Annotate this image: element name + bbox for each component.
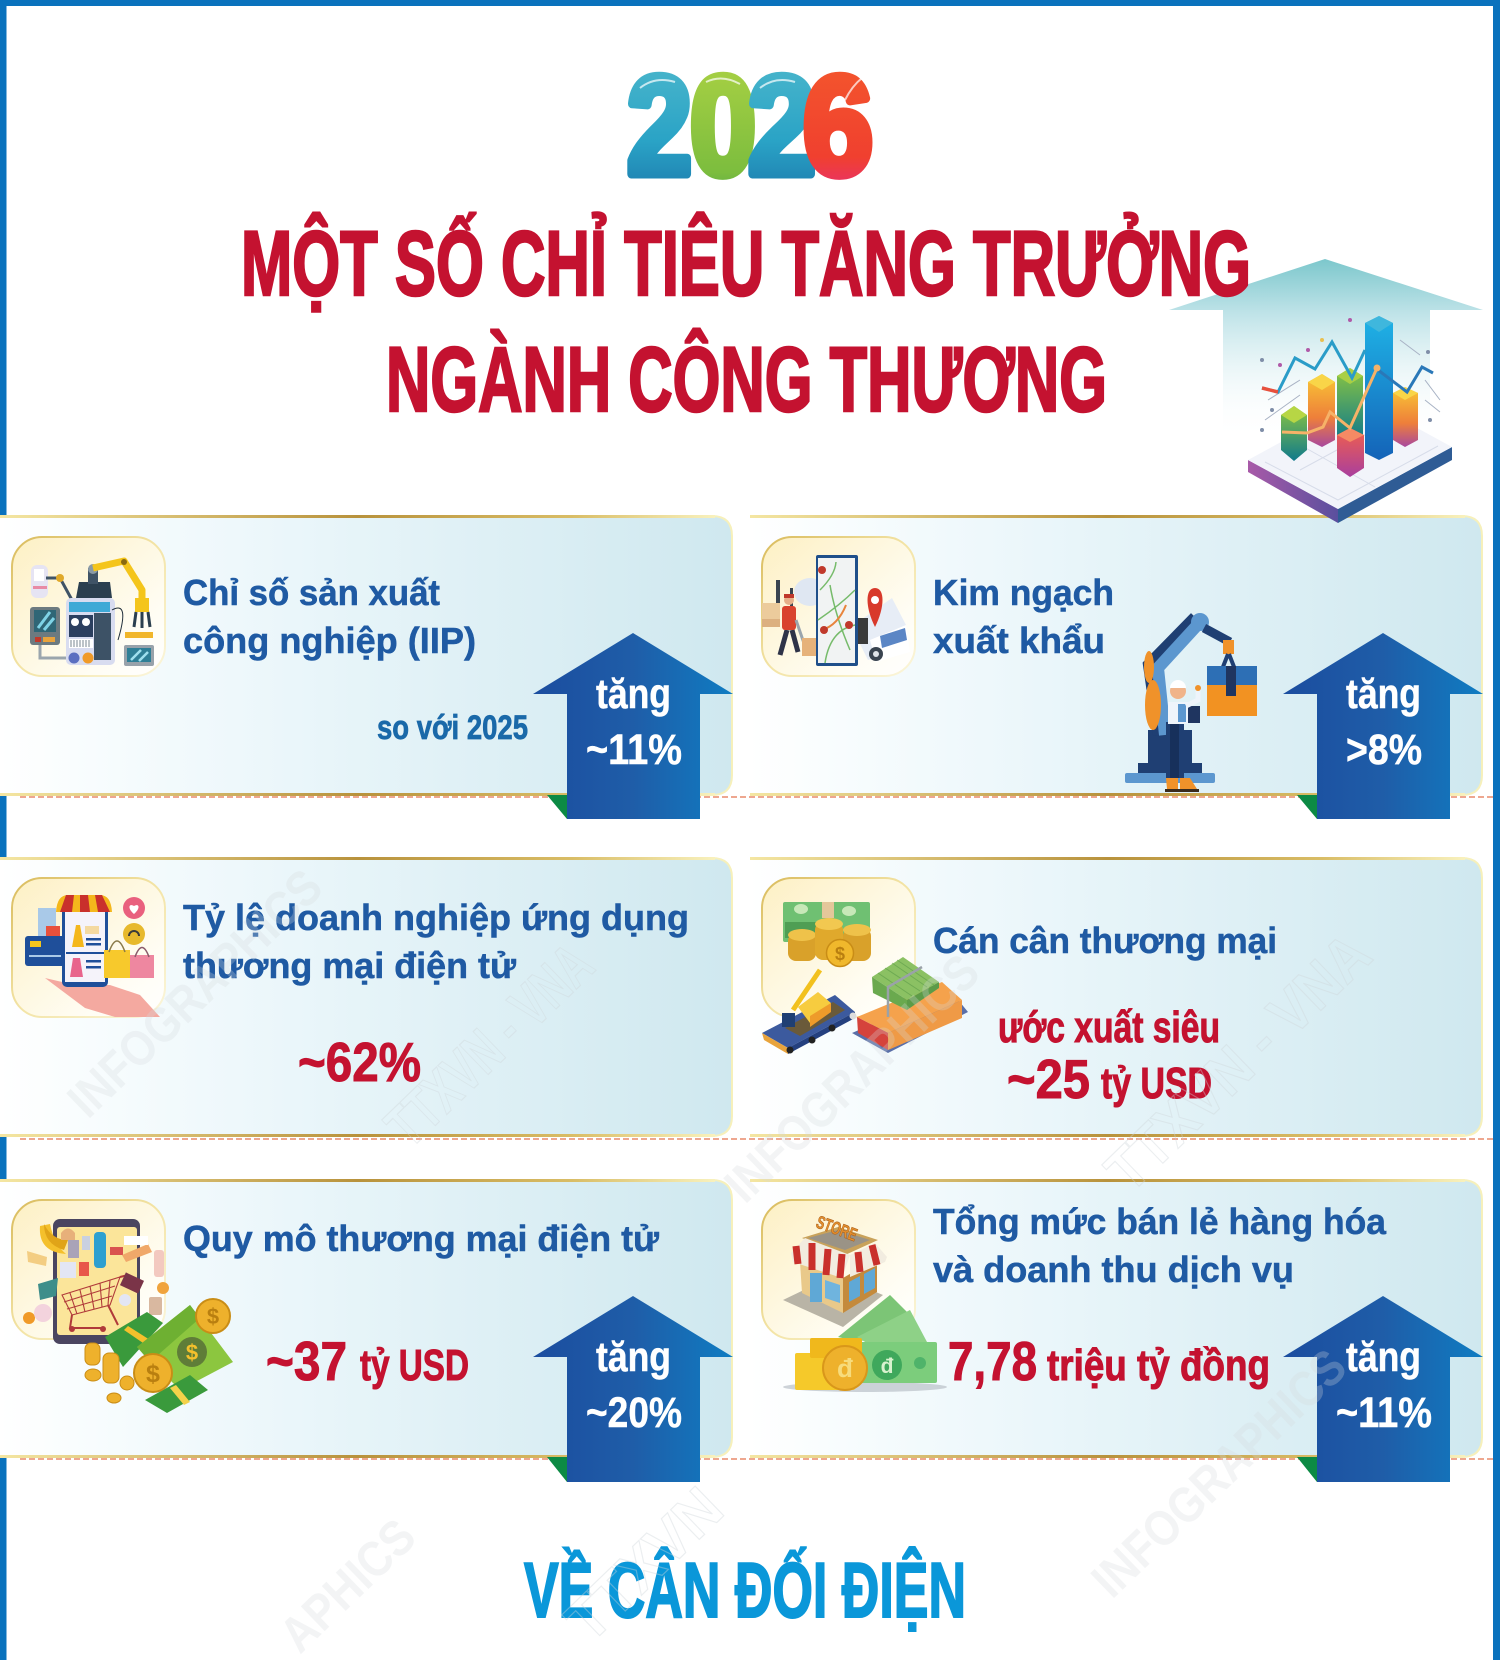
value: ước xuất siêu: ước xuất siêu <box>998 1003 1220 1052</box>
value: 7,78 triệu tỷ đồng: triệu tỷ đồng <box>1047 1341 1270 1390</box>
watermark: infographics and TTXVN VNA: INFOGRAPHICS <box>714 943 990 1213</box>
watermark: infographics and TTXVN VNA: TTXVN <box>552 1474 736 1654</box>
heading: Cán cân thương mại <box>933 920 1277 961</box>
icon: cash, crane truck and containers <box>762 878 968 1054</box>
heading: Kim ngạch <box>933 572 1114 613</box>
icon: 2026 colourful year <box>627 47 873 204</box>
icon: factory robot <box>12 537 165 676</box>
icon: logistics map and delivery truck <box>762 537 915 676</box>
value: ~25 tỷ USD <box>1007 1048 1212 1110</box>
arrow: tăng ~20%: tăng <box>596 1333 671 1380</box>
arrow: tăng ~20%: ~20% <box>586 1389 682 1437</box>
panel: kim ngạch xuất khẩu <box>750 515 1483 819</box>
value: ~62%: ~62% <box>298 1031 421 1093</box>
watermark: infographics and TTXVN VNA: INFOGRAPHICS <box>1081 1338 1357 1608</box>
icon: online shopping cart and money <box>12 1200 233 1413</box>
icon: 2026 colourful year: 0 <box>690 47 756 204</box>
icon: 2026 colourful year: 6 <box>803 47 873 204</box>
heading <box>183 897 689 986</box>
icon: pale growth arrow behind title <box>1169 259 1483 440</box>
value: ~37 tỷ USD: ~37 <box>266 1330 347 1392</box>
watermark: infographics and TTXVN VNA <box>57 858 1384 1660</box>
arrow: tăng ~11%: tăng <box>1346 1333 1421 1380</box>
value: ~25 tỷ USD: tỷ USD <box>1101 1059 1212 1108</box>
icon: store with banknotes and coins <box>762 1200 947 1392</box>
heading <box>933 1201 1387 1290</box>
icon: cash, crane truck and containers: $ <box>835 944 845 964</box>
icon: store with banknotes and coins: đ <box>837 1353 853 1383</box>
watermark: infographics and TTXVN VNA: TTXVN - VNA <box>372 931 606 1159</box>
icon: store with banknotes and coins: STORE <box>814 1212 860 1245</box>
illustration: robot arm and worker <box>1125 613 1257 792</box>
heading: và doanh thu dịch vụ <box>933 1249 1294 1290</box>
heading: thương mại điện tử <box>183 945 517 986</box>
icon: store with banknotes and coins: đ <box>881 1355 894 1378</box>
heading: Tổng mức bán lẻ hàng hóa <box>933 1201 1387 1242</box>
note: so với 2025: so với 2025 <box>377 709 528 747</box>
watermark: infographics and TTXVN VNA: TTXVN - VNA <box>1092 920 1384 1204</box>
panel: tổng mức bán lẻ hàng hóa <box>750 1179 1483 1482</box>
heading: công nghiệp (IIP) <box>183 620 476 661</box>
title: NGÀNH CÔNG THƯƠNG <box>386 328 1107 431</box>
arrow: tăng ~20% <box>533 1296 733 1482</box>
arrow: tăng ~11%: ~11% <box>586 726 682 774</box>
heading: Tỷ lệ doanh nghiệp ứng dụng <box>183 897 689 938</box>
heading: Chỉ số sản xuất <box>183 572 440 613</box>
panel: chỉ số sản xuất công nghiệp <box>0 515 733 819</box>
icon: 2026 colourful year: 2 <box>748 47 816 204</box>
panel: quy mô thương mại điện tử <box>0 1179 733 1482</box>
icon: online shopping cart and money: $ <box>146 1360 160 1388</box>
arrow: tăng >8%: >8% <box>1346 726 1422 774</box>
panel: cán cân thương mại <box>750 857 1482 1137</box>
icon: online shopping cart and money: $ <box>207 1304 219 1329</box>
arrow: tăng ~11%: ~11% <box>1336 1389 1432 1437</box>
icon: 2026 colourful year: 2 <box>627 47 692 204</box>
arrow: tăng ~11% <box>1283 1296 1483 1482</box>
arrow: tăng >8%: tăng <box>1346 670 1421 717</box>
heading: Quy mô thương mại điện tử <box>183 1218 660 1259</box>
watermark: infographics and TTXVN VNA: APHICS <box>269 1508 426 1660</box>
icon: online shopping cart and money: $ <box>186 1340 198 1365</box>
value: 7,78 triệu tỷ đồng <box>948 1330 1270 1392</box>
value: ~37 tỷ USD <box>266 1330 469 1392</box>
value: ~25 tỷ USD: ~25 <box>1007 1048 1090 1110</box>
section heading: về cân đối điện: VỀ CÂN ĐỐI ĐIỆN <box>524 1546 966 1634</box>
arrow: tăng ~11%: tăng <box>596 670 671 717</box>
arrow: tăng >8% <box>1283 633 1483 819</box>
value: ~37 tỷ USD: tỷ USD <box>360 1341 469 1390</box>
heading <box>183 572 476 661</box>
heading: xuất khẩu <box>933 620 1105 661</box>
title <box>241 211 1251 431</box>
heading <box>933 572 1114 661</box>
watermark: infographics and TTXVN VNA: INFOGRAPHICS <box>57 858 333 1128</box>
icon: online shop on phone <box>12 878 165 1017</box>
icon: 3D bar chart on platform <box>1248 316 1452 523</box>
dashed separator lines <box>20 797 1493 1459</box>
arrow: tăng ~11% <box>533 633 733 819</box>
value: 7,78 triệu tỷ đồng: 7,78 <box>948 1330 1037 1392</box>
panel: tỷ lệ doanh nghiệp ứng dụng thương mại điện tử <box>0 857 732 1137</box>
